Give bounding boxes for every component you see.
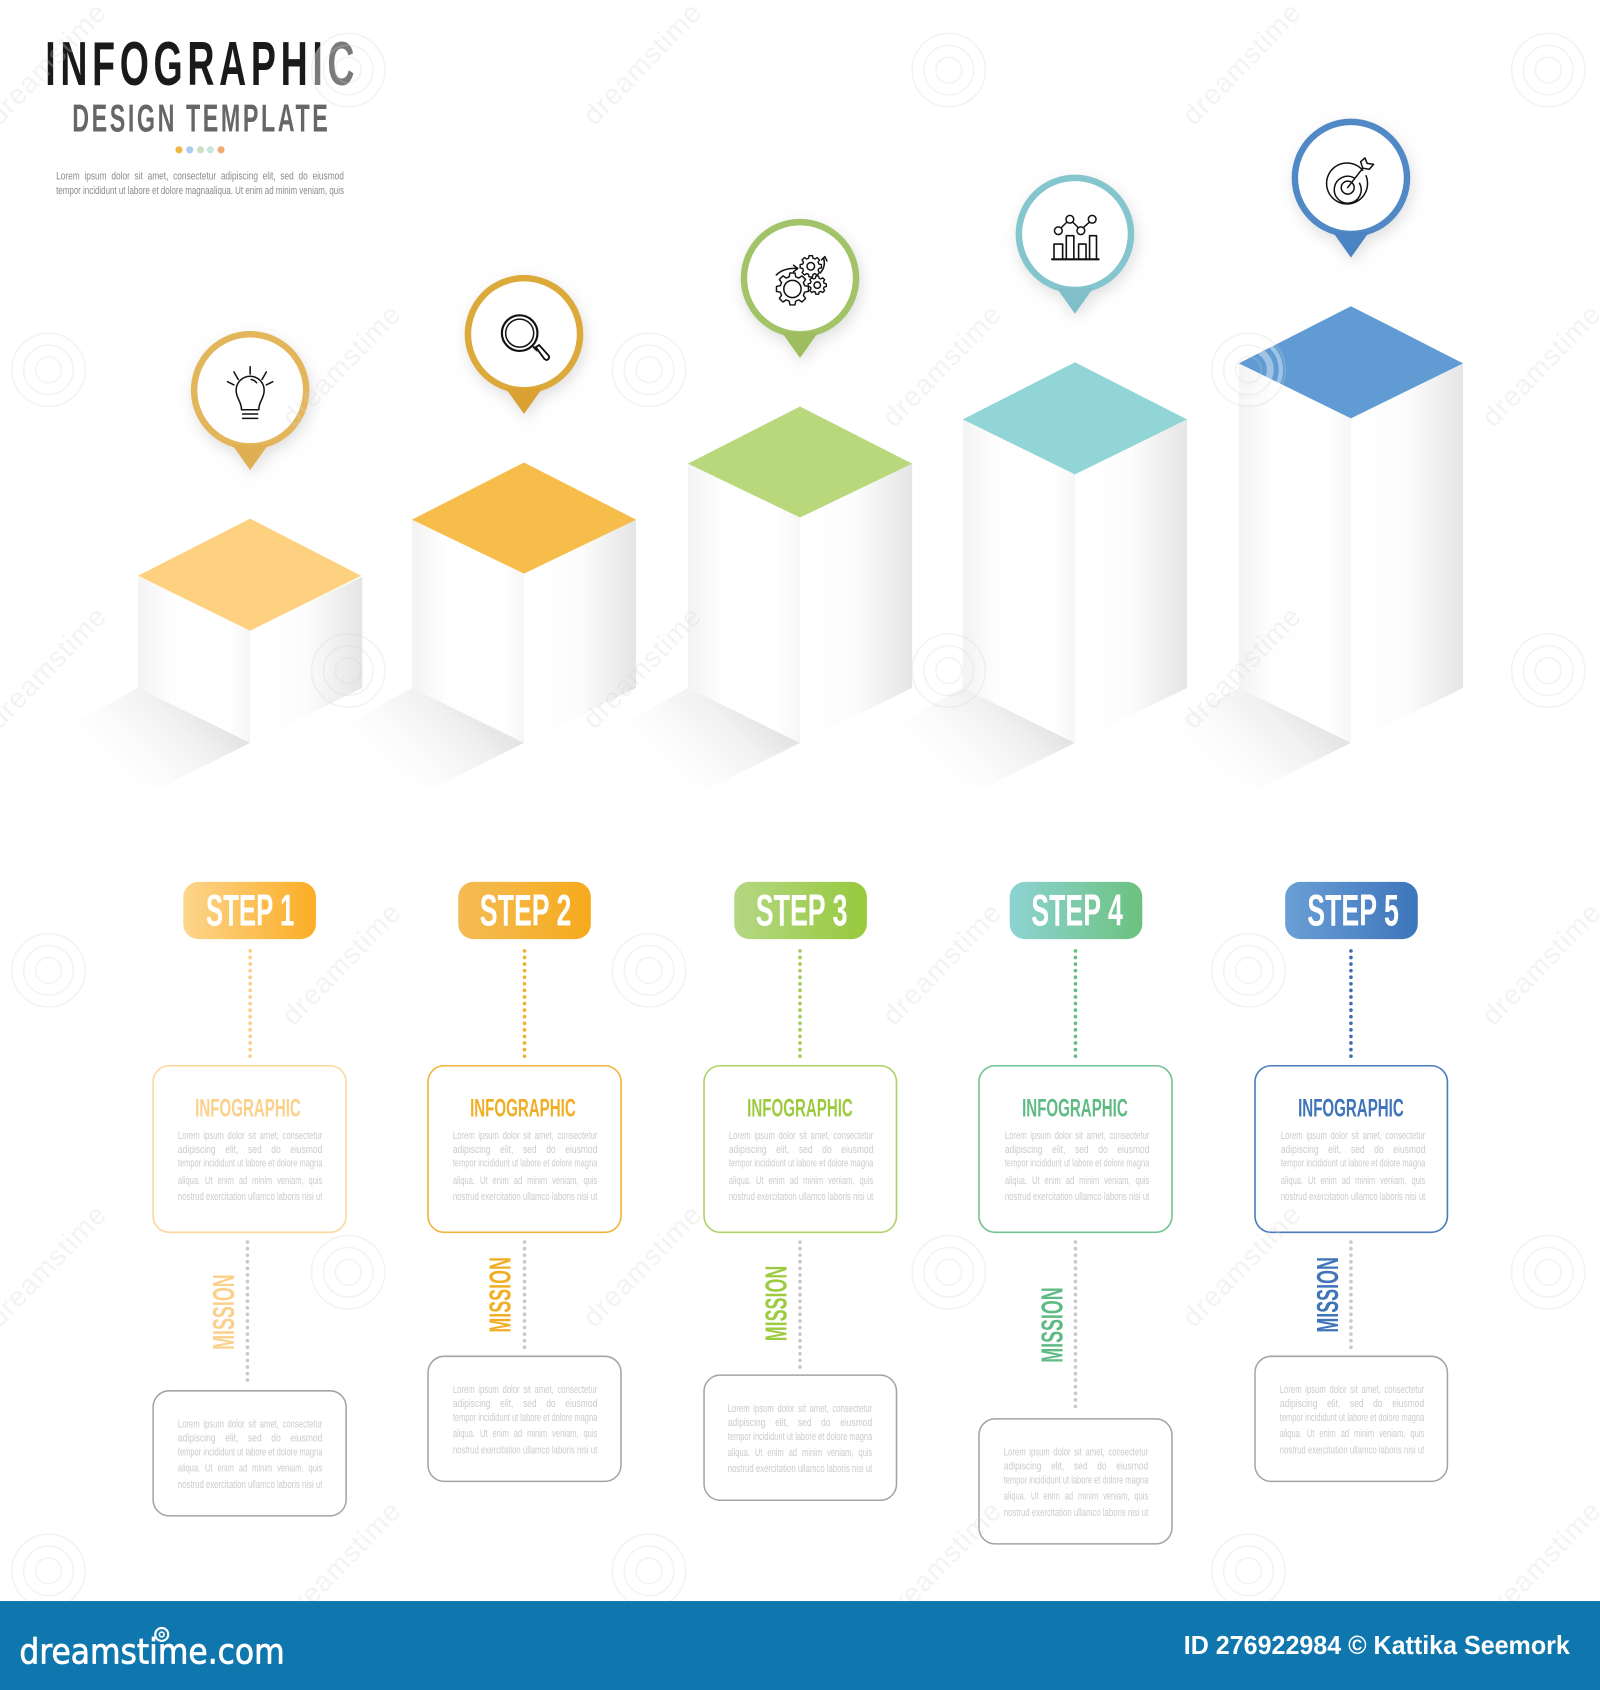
step label: STEP 3: [756, 887, 847, 936]
info box: Lorem ipsum dolor sit amet, consectetur: [729, 1130, 873, 1142]
info box: nostrud exercitation ullamco laboris nisi ut: [178, 1191, 323, 1203]
info box: adipiscing elit, sed do eiusmod: [178, 1144, 322, 1156]
mission box: Lorem ipsum dolor sit amet, consectetur: [453, 1384, 597, 1396]
mission box: nostrud exercitation ullamco laboris nisi ut: [178, 1479, 323, 1491]
right face: [1075, 419, 1187, 743]
text: dreamstime: [1176, 1198, 1307, 1333]
mission box: aliqua. Ut enim ad minim veniam, quis: [178, 1463, 323, 1475]
mission box: aliqua. Ut enim ad minim veniam, quis: [728, 1447, 872, 1459]
mission box: tempor incididunt ut labore et dolore magna: [178, 1447, 323, 1459]
block 5: [1128, 306, 1463, 788]
info box: [428, 1066, 621, 1232]
info box: INFOGRAPHIC: [1022, 1095, 1128, 1122]
shadow: [27, 688, 250, 788]
mission box: Lorem ipsum dolor sit amet, consectetur: [1280, 1384, 1424, 1396]
info box: Lorem ipsum dolor sit amet, consectetur: [178, 1130, 323, 1142]
mission box: nostrud exercitation ullamco laboris nisi ut: [453, 1444, 598, 1456]
top face: [1239, 306, 1463, 418]
mission box: [979, 1419, 1172, 1544]
text: dreamstime: [276, 298, 407, 433]
text: dreamstime: [876, 1495, 1008, 1629]
text: dreamstime: [876, 896, 1008, 1031]
info box: [704, 1066, 896, 1232]
pin 5: target: [1292, 119, 1410, 258]
info box: adipiscing elit, sed do eiusmod: [1281, 1144, 1425, 1156]
step label: [1010, 882, 1142, 939]
step label: STEP 2: [480, 887, 571, 936]
brand logo: dreamstime.com: [19, 1633, 285, 1673]
intro text: [56, 171, 344, 197]
info box: [979, 1066, 1172, 1232]
info box: aliqua. Ut enim ad minim veniam, quis: [178, 1175, 323, 1187]
info box: tempor incididunt ut labore et dolore magna: [1005, 1158, 1150, 1170]
mission label: MISSION: [761, 1266, 794, 1341]
text: dreamstime: [577, 0, 708, 131]
text: dreamstime: [876, 298, 1008, 433]
info box: tempor incididunt ut labore et dolore magna: [1281, 1158, 1426, 1170]
text: dreamstime: [577, 600, 708, 735]
mission box: aliqua. Ut enim ad minim veniam, quis: [1004, 1491, 1148, 1503]
right face: [524, 520, 636, 743]
info box: nostrud exercitation ullamco laboris nisi ut: [1005, 1191, 1150, 1203]
shadow: [852, 688, 1075, 788]
info box: adipiscing elit, sed do eiusmod: [1005, 1144, 1149, 1156]
info box: Lorem ipsum dolor sit amet, consectetur: [453, 1130, 597, 1142]
title block: [45, 28, 355, 197]
mission connector: [1074, 1242, 1077, 1410]
mission box: tempor incididunt ut labore et dolore magna: [1280, 1412, 1425, 1424]
block 3: [577, 406, 912, 788]
text: dreamstime: [1176, 600, 1307, 735]
icon: magnifier: [502, 315, 549, 360]
mission box: adipiscing elit, sed do eiusmod: [1280, 1398, 1424, 1410]
shadow: [577, 688, 800, 788]
left face: [412, 520, 524, 743]
top face: [688, 406, 912, 518]
text: dreamstime: [276, 1495, 407, 1629]
connector: [798, 951, 802, 1057]
mission box: Lorem ipsum dolor sit amet, consectetur: [1004, 1447, 1148, 1459]
step label: [734, 882, 867, 939]
column: step 4: [979, 882, 1172, 1544]
mission box: nostrud exercitation ullamco laboris nisi ut: [1004, 1507, 1149, 1519]
column: step 1: [153, 882, 346, 1516]
mission label: MISSION: [1312, 1257, 1345, 1333]
left face: [1239, 363, 1351, 743]
subheading: design template: DESIGN TEMPLATE: [72, 96, 328, 140]
mission box: tempor incididunt ut labore et dolore magna: [1004, 1475, 1149, 1487]
footer bar: [0, 1601, 1600, 1690]
text: dreamstime: [276, 896, 407, 1031]
column: step 2: [428, 882, 621, 1481]
mission box: adipiscing elit, sed do eiusmod: [453, 1398, 597, 1410]
mission box: adipiscing elit, sed do eiusmod: [178, 1432, 322, 1444]
info box: tempor incididunt ut labore et dolore magna: [453, 1158, 598, 1170]
right face: [1351, 363, 1463, 743]
step label: [458, 882, 591, 939]
icon: chart: [1052, 215, 1099, 259]
info box: INFOGRAPHIC: [747, 1095, 853, 1122]
right face: [250, 577, 362, 743]
mission box: adipiscing elit, sed do eiusmod: [728, 1417, 872, 1429]
block 2: [301, 463, 636, 788]
info box: Lorem ipsum dolor sit amet, consectetur: [1281, 1130, 1425, 1142]
info box: INFOGRAPHIC: [1298, 1095, 1404, 1122]
step label: STEP 5: [1307, 887, 1399, 936]
text: dreamstime: [1176, 0, 1307, 131]
mission label: MISSION: [208, 1274, 241, 1350]
icon: lightbulb: [228, 367, 273, 418]
text: dreamstime: [577, 1198, 708, 1333]
connector: [1074, 951, 1077, 1057]
info box: [153, 1066, 346, 1232]
top face: [138, 519, 361, 631]
info box: tempor incididunt ut labore et dolore magna: [178, 1158, 323, 1170]
mission box: tempor incididunt ut labore et dolore magna: [453, 1412, 598, 1424]
mission box: [153, 1391, 346, 1516]
icon: target: [1327, 158, 1374, 204]
pin 1: lightbulb: [191, 331, 309, 470]
pin 2: magnifier: [465, 275, 583, 414]
info box: nostrud exercitation ullamco laboris nisi ut: [453, 1191, 598, 1203]
block 1: [27, 519, 362, 788]
info box: INFOGRAPHIC: [470, 1095, 576, 1122]
shadow: [1128, 688, 1351, 788]
left face: [963, 419, 1075, 743]
mission connector: [523, 1242, 526, 1349]
pin 3: gears: [741, 219, 859, 358]
step label: STEP 4: [1031, 887, 1123, 936]
step label: [1285, 882, 1418, 939]
mission box: [1255, 1356, 1447, 1481]
icon: gears: [776, 256, 827, 305]
mission box: nostrud exercitation ullamco laboris nisi ut: [1280, 1444, 1425, 1456]
info box: INFOGRAPHIC: [195, 1095, 301, 1122]
image credit: ID 276922984 © Kattika Seemork: [1184, 1632, 1570, 1660]
right face: [800, 464, 912, 743]
info box: nostrud exercitation ullamco laboris nisi ut: [1281, 1191, 1426, 1203]
top face: [963, 362, 1187, 474]
heading: infographic: INFOGRAPHIC: [45, 28, 355, 99]
mission box: Lorem ipsum dolor sit amet, consectetur: [178, 1418, 323, 1430]
info box: [1255, 1066, 1447, 1232]
info box: aliqua. Ut enim ad minim veniam, quis: [453, 1175, 598, 1187]
colour dots: [175, 146, 225, 153]
connector: [1349, 951, 1353, 1057]
connector: [248, 951, 252, 1057]
info box: aliqua. Ut enim ad minim veniam, quis: [1005, 1175, 1150, 1187]
intro text: Lorem ipsum dolor sit amet, consectetur adipiscing elit, sed do eiusmod: [56, 171, 344, 183]
mission box: Lorem ipsum dolor sit amet, consectetur: [728, 1403, 872, 1415]
column: step 5: [1255, 882, 1447, 1481]
intro text: tempor incididunt ut labore et dolore magnaaliqua. Ut enim ad minim veniam, quis: [56, 185, 344, 197]
info box: adipiscing elit, sed do eiusmod: [729, 1144, 873, 1156]
mission box: [428, 1356, 621, 1481]
mission connector: [798, 1242, 802, 1368]
column: step 3: [704, 882, 896, 1500]
mission connector: [1349, 1242, 1353, 1349]
left face: [138, 577, 250, 743]
mission box: aliqua. Ut enim ad minim veniam, quis: [453, 1428, 598, 1440]
mission box: nostrud exercitation ullamco laboris nisi ut: [728, 1463, 873, 1475]
info box: aliqua. Ut enim ad minim veniam, quis: [1281, 1175, 1426, 1187]
mission box: adipiscing elit, sed do eiusmod: [1004, 1461, 1148, 1473]
shadow: [301, 688, 524, 788]
pin 4: chart: [1016, 175, 1134, 314]
top face: [412, 463, 636, 574]
info box: tempor incididunt ut labore et dolore magna: [729, 1158, 874, 1170]
step label: STEP 1: [206, 887, 294, 936]
info box: aliqua. Ut enim ad minim veniam, quis: [729, 1175, 874, 1187]
mission label: MISSION: [1037, 1287, 1070, 1363]
block 4: [852, 362, 1187, 788]
left face: [688, 464, 800, 743]
mission label: MISSION: [485, 1257, 518, 1333]
step label: [183, 882, 316, 939]
info box: adipiscing elit, sed do eiusmod: [453, 1144, 597, 1156]
mission box: [704, 1375, 896, 1500]
connector: [523, 951, 526, 1057]
mission connector: [246, 1242, 249, 1384]
mission box: aliqua. Ut enim ad minim veniam, quis: [1280, 1428, 1424, 1440]
mission box: tempor incididunt ut labore et dolore magna: [728, 1431, 873, 1443]
info box: nostrud exercitation ullamco laboris nisi ut: [729, 1191, 874, 1203]
info box: Lorem ipsum dolor sit amet, consectetur: [1005, 1130, 1149, 1142]
